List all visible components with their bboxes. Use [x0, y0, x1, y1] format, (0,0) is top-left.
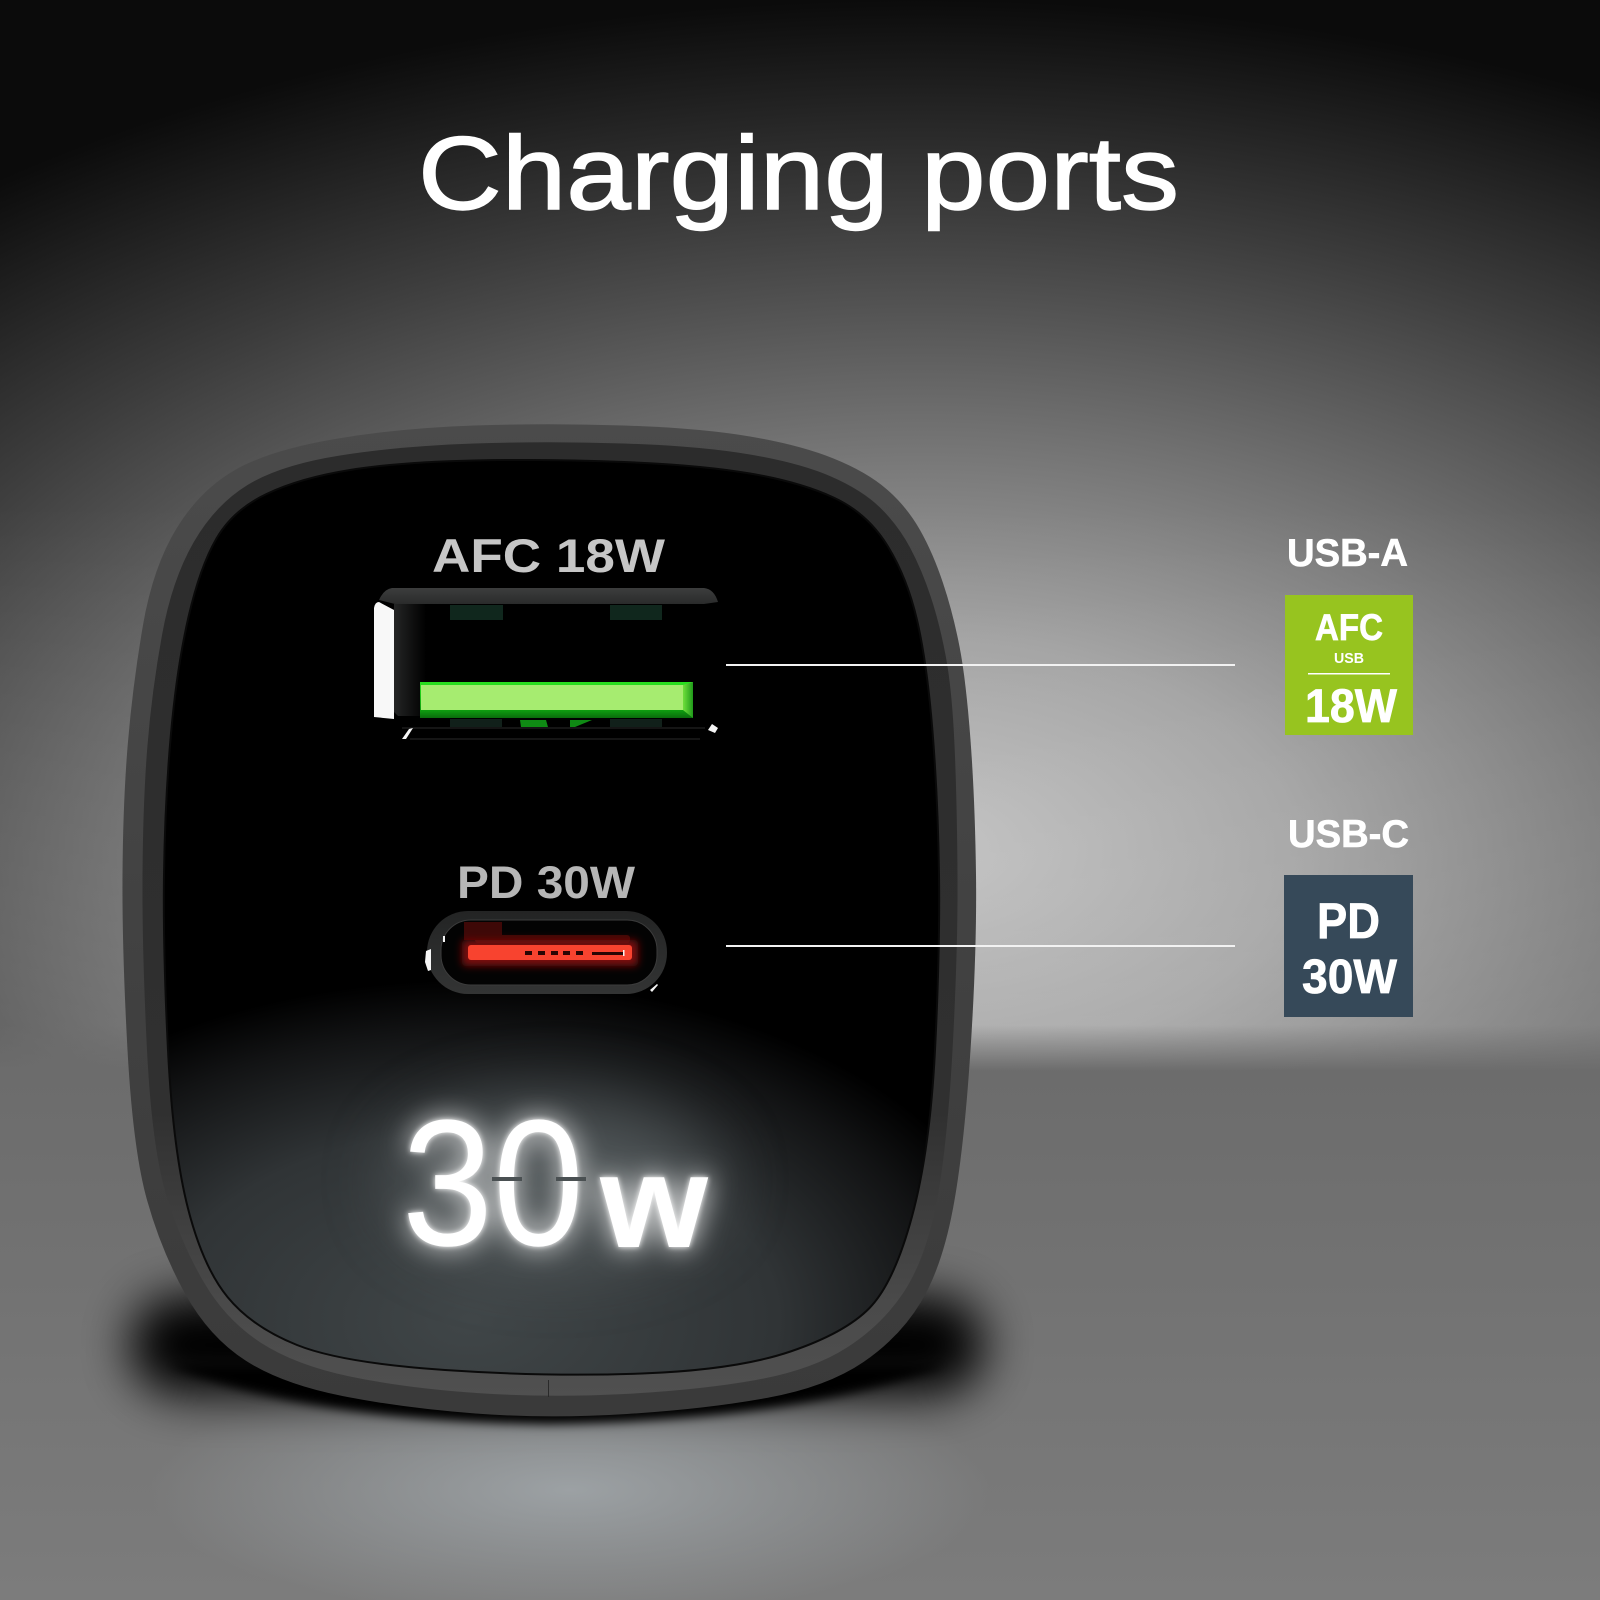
USB-C port	[425, 911, 667, 994]
badge: AFC USB 18W	[1285, 595, 1413, 735]
port label: PD 30W: PD 30W	[457, 857, 636, 908]
bottom seam	[548, 1380, 549, 1397]
inner ring	[142, 442, 958, 1396]
digits and unit: w	[599, 1128, 708, 1275]
badge: AFC USB 18W: 18W	[1305, 679, 1398, 732]
label: USB-A: USB-A	[1287, 532, 1408, 575]
green tongue right facet	[683, 682, 693, 718]
leader line: USB-C	[726, 945, 1235, 947]
red contact tongue	[468, 945, 632, 960]
digits and unit: 30	[402, 1083, 584, 1284]
badge: PD 30W: PD	[1317, 893, 1380, 949]
dim red reflections	[462, 922, 638, 966]
segment breaks	[492, 1177, 586, 1181]
contact pins	[525, 951, 623, 955]
digits and unit	[402, 1083, 708, 1284]
top bevel	[379, 588, 718, 604]
wattage display: 30w	[390, 1083, 720, 1284]
lower lip lines	[402, 728, 705, 739]
dim upper contacts	[450, 605, 662, 620]
charger shadow on floor	[130, 1295, 985, 1424]
badge: AFC USB 18W: AFC	[1315, 607, 1383, 648]
outer ring	[122, 424, 976, 1416]
badge: AFC USB 18W: USB	[1334, 650, 1364, 667]
badge: PD 30W	[1284, 875, 1413, 1017]
lower contacts	[450, 719, 662, 727]
port cavity	[441, 920, 657, 985]
black glossy face	[164, 460, 939, 1375]
USB-A port	[374, 588, 718, 740]
badge: PD 30W: 30W	[1302, 951, 1398, 1004]
green tongue bright face	[421, 685, 683, 710]
left inner wall	[394, 604, 426, 716]
label: USB-C: USB-C	[1288, 813, 1409, 856]
green tongue base	[420, 682, 693, 718]
port frame	[427, 911, 667, 994]
title: Charging ports	[418, 116, 1179, 232]
leader line: USB-A	[726, 664, 1235, 666]
white glints	[425, 936, 658, 992]
display glow	[390, 1095, 720, 1265]
white edge highlight	[374, 602, 394, 719]
port cavity	[392, 588, 718, 740]
port label: AFC 18W: AFC 18W	[432, 529, 666, 582]
white glints	[402, 724, 718, 739]
charger body	[122, 424, 976, 1416]
